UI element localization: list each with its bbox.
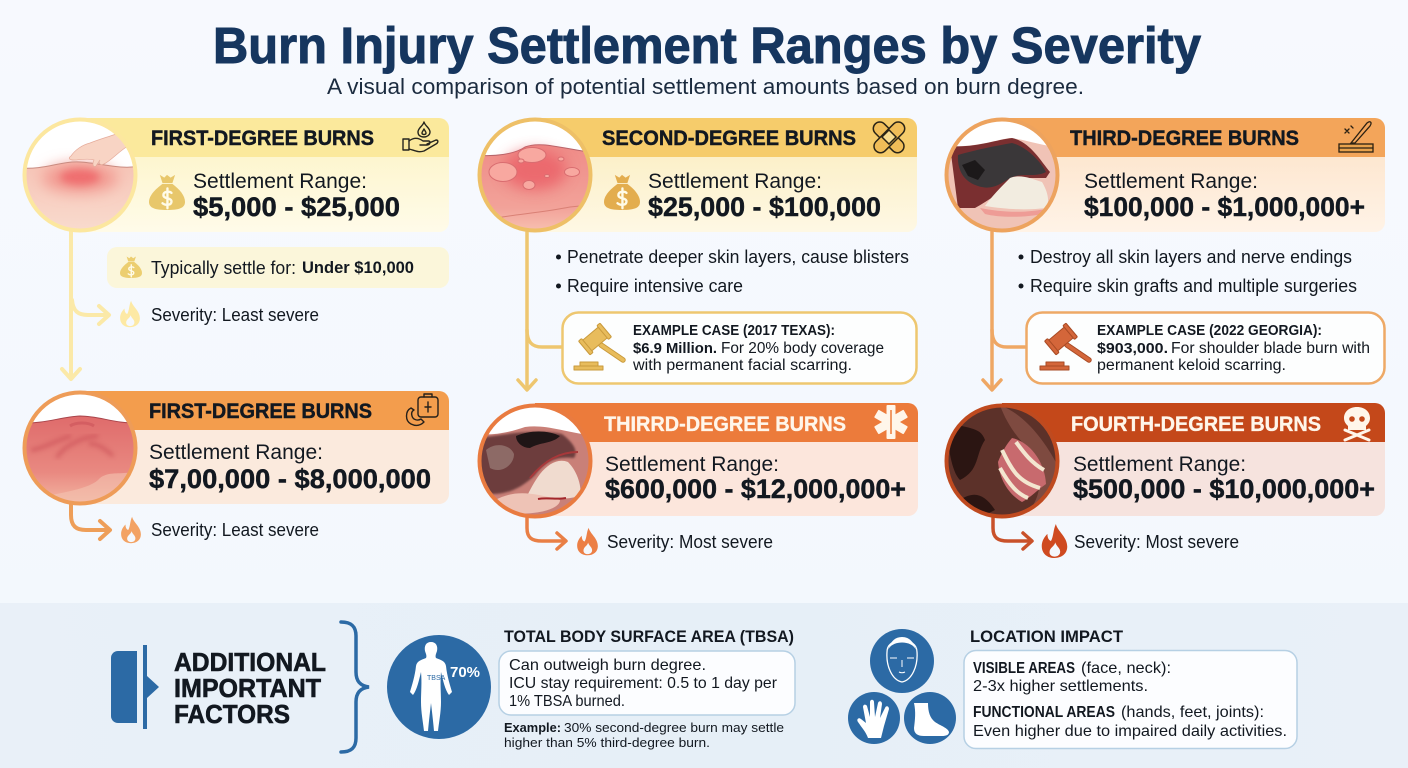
- callout: typically settle: [107, 247, 449, 288]
- card header: [80, 391, 449, 430]
- icon: flame: [577, 528, 598, 555]
- location text box: VISIBLE AREAS: [973, 660, 1075, 677]
- subtitle: A visual comparison of potential settlement amounts based on burn degree.: [327, 74, 1084, 99]
- icon: gavel: [574, 323, 623, 370]
- settlement amount: $600,000 - $12,000,000+: [605, 474, 906, 504]
- callout: example case Texas: with permanent facial scarring.: [632, 357, 852, 374]
- bullet list: Penetrate deeper skin layers, cause blisters: [567, 247, 909, 267]
- icon: money bag: [604, 175, 640, 210]
- bullet list: [1018, 247, 1357, 296]
- location text box: [964, 650, 1297, 748]
- location heading: LOCATION IMPACT: [970, 627, 1124, 646]
- icon: scalpel and skin: [1339, 122, 1373, 152]
- bullet list: Destroy all skin layers and nerve endings: [1030, 247, 1352, 267]
- panel: thirrd-degree burns: [475, 403, 918, 555]
- icon: skull and crossbones: [1344, 407, 1370, 440]
- bottom band: [0, 603, 1408, 768]
- location text box: Even higher due to impaired daily activities.: [973, 723, 1287, 740]
- settlement amount: $7,00,000 - $8,000,000: [149, 464, 431, 494]
- card body: [1002, 157, 1385, 232]
- callout: example case Texas: $6.9 Million.: [633, 340, 717, 357]
- card header: [80, 118, 449, 157]
- settlement amount: $25,000 - $100,000: [648, 192, 881, 222]
- heading: additional important factors: FACTORS: [174, 699, 290, 729]
- settlement amount: $100,000 - $1,000,000+: [1084, 192, 1365, 222]
- bullet list: Require skin grafts and multiple surgeries: [1030, 276, 1357, 296]
- callout: example case Georgia: EXAMPLE CASE (2022 GEORGIA):: [1097, 323, 1322, 339]
- heading: THIRD-DEGREE BURNS: [1070, 127, 1299, 150]
- icon: phone and medical kit: [406, 394, 438, 425]
- TBSA text box: [499, 651, 795, 715]
- settlement label: Settlement Range:: [648, 170, 822, 193]
- icon: foot: [904, 692, 956, 744]
- icon: star of life: [874, 405, 908, 439]
- panel: first-degree burns, low range: [20, 118, 449, 379]
- icon: tab marker: [111, 645, 159, 729]
- location text box: FUNCTIONAL AREAS: [973, 704, 1115, 721]
- heading: additional important factors: [174, 647, 326, 729]
- card body: [535, 157, 917, 232]
- TBSA text box: ICU stay requirement: 0.5 to 1 day per: [509, 675, 778, 692]
- burn image: third degree: [475, 404, 595, 525]
- settlement label: Settlement Range:: [193, 170, 367, 193]
- icon: flame: [1042, 524, 1067, 558]
- connector: severity arrow: [527, 518, 566, 549]
- title: Burn Injury Settlement Ranges by Severity: [213, 17, 1202, 74]
- card header: [535, 403, 918, 442]
- bullet list: [556, 247, 909, 296]
- card header: [1002, 118, 1385, 157]
- card header: [1002, 403, 1385, 442]
- callout: typically settle: Typically settle for:: [151, 258, 296, 278]
- connector: second-degree arrows: [518, 232, 563, 390]
- burn image: charred: [945, 118, 1062, 235]
- TBSA text box: 1% TBSA burned.: [509, 693, 625, 710]
- card body: [80, 157, 449, 232]
- panel: third-degree burns: [945, 118, 1385, 390]
- panel: first-degree burns, high range: [20, 391, 449, 543]
- severity: Severity: Most severe: [607, 532, 773, 552]
- icon: body with 70 percent: [387, 635, 491, 739]
- connector: third-degree arrows: [983, 232, 1027, 390]
- heading: additional important factors: ADDITIONAL: [174, 647, 326, 677]
- connector: severity arrow: [71, 505, 110, 539]
- TBSA example: higher than 5% third-degree burn.: [504, 735, 710, 750]
- callout: example case Georgia: permanent keloid scarring.: [1097, 357, 1286, 374]
- location text box: (hands, feet, joints):: [1121, 704, 1264, 721]
- severity: Severity: Least severe: [151, 305, 319, 325]
- card body: [535, 442, 918, 516]
- TBSA example: 30% second-degree burn may settle: [564, 720, 784, 735]
- TBSA example: [504, 720, 784, 750]
- icon: flame: [121, 517, 141, 543]
- icon: money bag: [149, 175, 185, 210]
- burn image: first degree: [20, 118, 140, 235]
- callout: example case Georgia: [1026, 312, 1384, 384]
- severity: Severity: Most severe: [1074, 532, 1239, 552]
- heading: SECOND-DEGREE BURNS: [602, 127, 856, 150]
- location text box: 2-3x higher settlements.: [973, 678, 1148, 695]
- connector: severity arrow: [993, 518, 1032, 549]
- settlement label: Settlement Range:: [605, 453, 779, 476]
- connector: first-degree arrows: [62, 232, 109, 379]
- severity: Severity: Least severe: [151, 520, 319, 540]
- TBSA heading: TOTAL BODY SURFACE AREA (TBSA): [504, 627, 794, 646]
- card body: [1002, 442, 1385, 516]
- panel: fourth-degree burns: [945, 403, 1385, 558]
- heading: additional important factors: IMPORTANT: [174, 673, 321, 703]
- burn image: fourth degree: [945, 404, 1060, 520]
- callout: example case Texas: For 20% body coverage: [721, 340, 884, 357]
- panel: additional important factors: [0, 603, 1408, 768]
- icon: body with 70 percent: TBSA: [427, 675, 446, 682]
- card header: [535, 118, 917, 157]
- icon: body with 70 percent: 70%: [450, 664, 480, 681]
- settlement amount: $500,000 - $10,000,000+: [1073, 474, 1375, 504]
- panel: second-degree burns: [475, 118, 917, 390]
- icon: face: [870, 629, 934, 693]
- icon: hand with flame: [403, 122, 438, 152]
- callout: example case Texas: [562, 312, 916, 384]
- icon: hand: [848, 692, 900, 744]
- bullet list: Require intensive care: [567, 276, 743, 296]
- TBSA text box: Can outweigh burn degree.: [509, 657, 706, 674]
- icon: gavel: [1040, 323, 1089, 370]
- callout: example case Georgia: $903,000.: [1097, 340, 1168, 357]
- callout: example case Texas: EXAMPLE CASE (2017 TEXAS):: [633, 323, 835, 339]
- TBSA example: Example:: [504, 720, 561, 735]
- callout: example case Georgia: For shoulder blade burn with: [1171, 340, 1370, 357]
- heading: THIRRD-DEGREE BURNS: [604, 413, 846, 436]
- burn image: first degree deep: [20, 391, 140, 510]
- heading: FIRST-DEGREE BURNS: [151, 127, 374, 150]
- burn image: blisters: [475, 118, 600, 235]
- settlement amount: $5,000 - $25,000: [193, 192, 400, 222]
- settlement label: Settlement Range:: [1073, 453, 1246, 476]
- heading: FIRST-DEGREE BURNS: [149, 400, 372, 423]
- callout: typically settle: Under $10,000: [302, 258, 414, 277]
- settlement label: Settlement Range:: [149, 441, 323, 464]
- brace: [341, 622, 369, 752]
- card body: [80, 430, 449, 504]
- location text box: (face, neck):: [1081, 660, 1171, 677]
- settlement label: Settlement Range:: [1084, 170, 1258, 193]
- icon: flame: [120, 301, 140, 327]
- icon: bandage: [871, 119, 907, 155]
- heading: FOURTH-DEGREE BURNS: [1071, 413, 1321, 436]
